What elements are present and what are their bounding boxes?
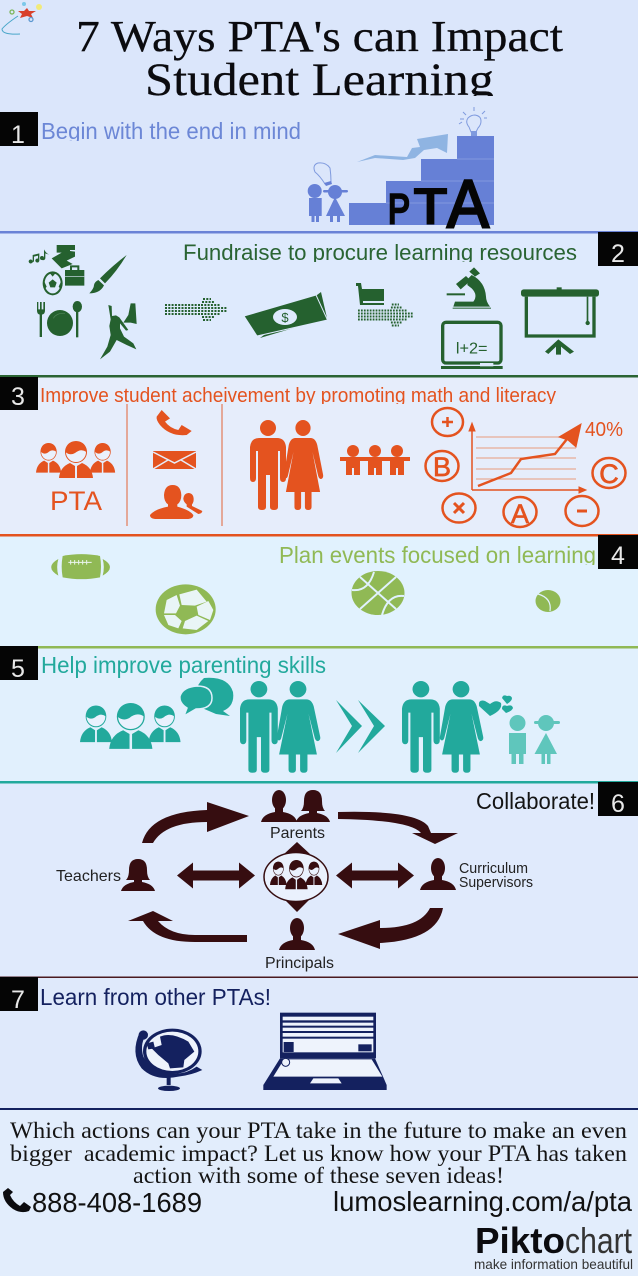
- PTA lettering: T: [414, 180, 447, 234]
- icon: tablet with sum: [441, 322, 503, 369]
- number badge 6: 6: [611, 790, 625, 818]
- text: website: lumoslearning.com/a/pta: [333, 1186, 632, 1217]
- icon: children: [509, 715, 560, 764]
- number badge 1: [0, 112, 38, 149]
- icon: PTA group: [36, 442, 115, 516]
- PTA lettering: [388, 166, 490, 242]
- icon: money: [244, 292, 328, 338]
- arrow: left double: [177, 862, 255, 888]
- icon: parents: [261, 790, 330, 822]
- number badge 7: [0, 977, 38, 1014]
- heading: learn from other PTAs: Learn from other PTAs!: [40, 984, 271, 1010]
- icon: small figure: [123, 303, 137, 324]
- number badge 1: 1: [11, 121, 25, 149]
- icon: central PTA circle: [264, 842, 328, 912]
- label: principals: Principals: [265, 955, 334, 972]
- title: 7 Ways PTA's can Impact: [76, 12, 563, 61]
- symbol: times: [442, 494, 476, 522]
- number badge 3: 3: [11, 383, 25, 411]
- chart: rising line with grades: [426, 408, 626, 529]
- title: [79, 22, 563, 96]
- heading: begin with the end in mind: Begin with the end in mind: [41, 118, 301, 144]
- arrow: dotted arrow one: [165, 299, 227, 320]
- arrow: rising zigzag: [357, 134, 448, 162]
- icon: parents teal two: [402, 681, 483, 773]
- icon: contacts: [150, 485, 202, 519]
- label: teachers: Teachers: [56, 868, 121, 885]
- icon: football: [51, 554, 110, 579]
- arrow: supervisors to principals: [338, 908, 443, 949]
- label: 40%: 40%: [585, 419, 623, 441]
- PTA lettering: P: [388, 185, 410, 232]
- number badge 6: [598, 782, 638, 818]
- icon: speech bubbles: [180, 678, 233, 716]
- icon: PTA group teal: [80, 704, 181, 749]
- panel: section 7 background: [0, 977, 638, 1109]
- icon: paintbrush: [89, 255, 127, 293]
- icon: children row: [340, 445, 410, 475]
- logo: Piktochart: make information beautiful: [474, 1256, 633, 1272]
- heading: parenting skills: Help improve parenting skills: [41, 652, 326, 678]
- number badge 2: 2: [611, 240, 625, 268]
- label: curriculum supervisors: [459, 860, 533, 891]
- symbol: letter A: A: [511, 499, 529, 529]
- icon: soccer ball: [43, 271, 63, 295]
- text: phone number: 888-408-1689: [32, 1187, 202, 1218]
- text block: call to action: action with some of these seven ideas!: [133, 1163, 504, 1189]
- number badge 5: [0, 646, 38, 683]
- symbol: letter C: [592, 458, 626, 489]
- icon: tennis ball: [536, 590, 560, 612]
- icon: laptop: [263, 1013, 387, 1090]
- symbol: letter B: B: [433, 452, 451, 482]
- icon: music notes: [29, 249, 49, 263]
- arrow: parents to supervisors: [338, 812, 458, 844]
- icon: phone: [3, 1188, 31, 1212]
- number badge 5: 5: [11, 655, 25, 683]
- icon: tablet with sum: l+2=: [456, 340, 488, 357]
- diagram: collaboration cycle: [56, 790, 533, 972]
- icons: school activities: [29, 245, 137, 359]
- dividers: [127, 404, 222, 526]
- number badge 3: [0, 377, 38, 411]
- number badge 4: 4: [611, 542, 625, 570]
- heading: collaborate: Collaborate!: [476, 788, 595, 814]
- icon: microscope: [447, 267, 491, 309]
- panel: section 6 background: [0, 782, 638, 977]
- logo: Piktochart: Pikto: [475, 1220, 565, 1261]
- icon: lightbulb on top: [459, 107, 487, 132]
- icon: soccer ball: [156, 584, 216, 634]
- symbol: minus: [566, 496, 598, 526]
- icon: hearts: [479, 695, 513, 716]
- text block: call to action: [10, 1118, 627, 1189]
- arrow: principals to teachers: [128, 911, 247, 942]
- label: parents: Parents: [270, 825, 325, 842]
- symbol: letter A: [504, 497, 536, 529]
- arrow: right double: [336, 862, 414, 888]
- label: PTA: PTA: [50, 486, 102, 516]
- PTA lettering: A: [447, 166, 490, 242]
- logo: Piktochart: [474, 1220, 633, 1272]
- heading: plan events: Plan events focused on learning: [279, 542, 596, 568]
- arrow: double chevron: [336, 700, 385, 753]
- icon: basketball: [352, 571, 404, 615]
- panel: section 5 background: [0, 647, 638, 782]
- symbol: plus: [432, 408, 463, 436]
- heading: improve student achievement: Improve student acheivement by promoting math and literacy: [40, 385, 556, 407]
- number badge 4: [598, 535, 638, 570]
- text block: call to action: bigger academic impact? Let us know how your PTA has taken: [10, 1141, 627, 1167]
- icon: envelope: [153, 451, 196, 469]
- panel: section 3 background: [0, 376, 638, 535]
- icon: phone: [157, 410, 192, 435]
- icon: parents teal one: [240, 681, 320, 773]
- number badge 7: 7: [11, 986, 25, 1014]
- arrow: teachers to parents: [142, 802, 249, 843]
- icon: shopping cart: [356, 283, 384, 305]
- text block: call to action: Which actions can your PTA take in the future to make an even: [10, 1118, 627, 1144]
- heading: fundraise: Fundraise to procure learning resources: [183, 240, 577, 265]
- icon: fork, plate and spoon: [37, 301, 82, 337]
- icon: teacher: [121, 859, 155, 891]
- icon: globe: [135, 1029, 202, 1091]
- icon: briefcase: [65, 265, 84, 286]
- title: Student Learning: [145, 54, 494, 106]
- icon: shooting star logo: [2, 2, 42, 34]
- icon: kids with lightbulb: [308, 163, 348, 222]
- icon: curriculum supervisor: [420, 858, 456, 890]
- icon: dancer: [100, 305, 136, 359]
- icon: money: $: [281, 310, 289, 325]
- icon: PTA staircase: [349, 107, 494, 242]
- symbol: letter B: [426, 451, 458, 482]
- panel: section 4 background: [0, 535, 638, 647]
- icon: projection screen: [521, 287, 599, 355]
- label: curriculum supervisors: Curriculum: [459, 860, 528, 877]
- icon: camera: [52, 245, 75, 268]
- icon: principal: [279, 918, 315, 950]
- panel: footer background: [0, 1109, 638, 1276]
- panel: section 2 background: [0, 232, 638, 376]
- icon: parents: [250, 420, 323, 510]
- arrow: dotted arrow two: [358, 304, 413, 326]
- number badge 2: [598, 232, 638, 268]
- label: curriculum supervisors: Supervisors: [459, 874, 533, 891]
- symbol: letter C: C: [599, 459, 619, 489]
